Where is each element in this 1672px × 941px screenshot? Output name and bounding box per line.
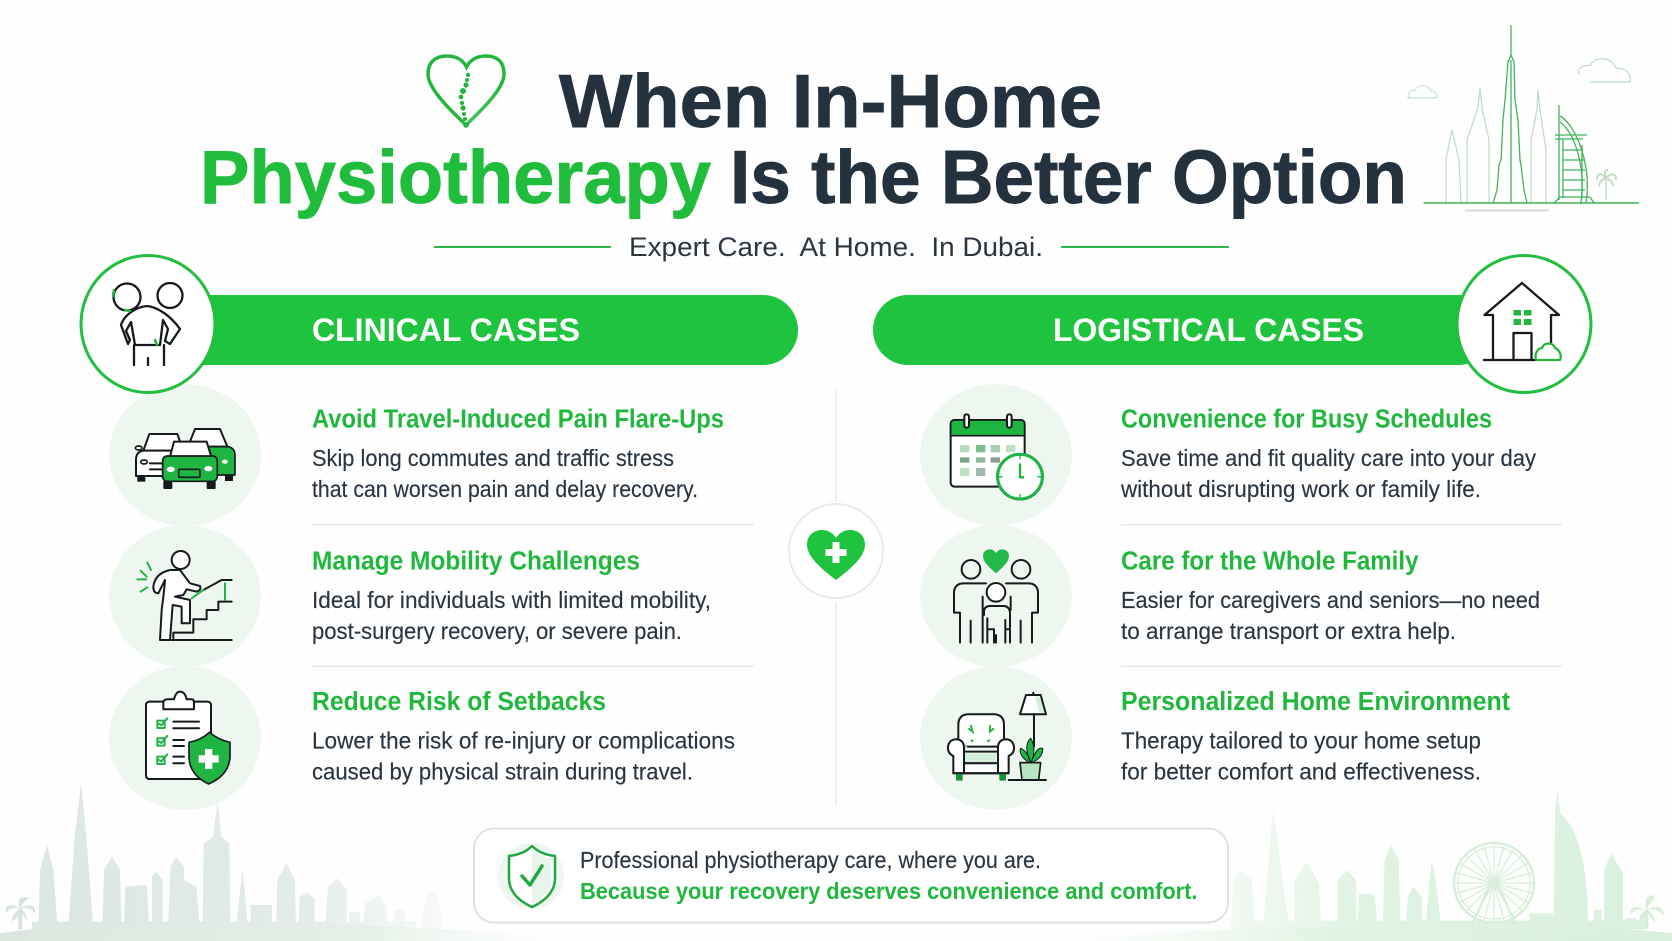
bottom-left skyline silhouette [0,783,587,941]
title: When In-Home [559,59,1102,143]
bottom-right skyline silhouette [1050,790,1672,941]
text block: personalized home environment [1121,688,1510,784]
callout: professional care box: Professional physiotherapy care, where you are. [580,847,1041,873]
icon: clipboard with shield [146,692,230,784]
title: Is the Better Option [730,135,1407,219]
text block: personalized home environment: for better comfort and effectiveness. [1121,758,1481,784]
icon: ferris wheel in skyline [1454,843,1534,925]
icon: calendar with clock [951,414,1043,500]
panel: clinical cases header: CLINICAL CASES [312,312,580,348]
text block: reduce risk of setbacks: Lower the risk of re-injury or complications [312,728,735,754]
text block: avoid travel-induced pain flare-ups: Skip long commutes and traffic stress [312,445,674,471]
panel: clinical cases header [81,256,798,392]
text block: personalized home environment: Therapy tailored to your home setup [1121,728,1481,754]
text block: avoid travel-induced pain flare-ups [312,406,724,502]
text block: convenience for busy schedules: without disrupting work or family life. [1120,476,1481,502]
text block: manage mobility challenges: Ideal for individuals with limited mobility, [312,587,711,613]
icon: armchair, lamp and plant [948,693,1046,781]
text block: reduce risk of setbacks [312,688,735,784]
subtitle with rules: Expert Care. At Home. In Dubai. [629,232,1043,262]
text block: avoid travel-induced pain flare-ups: Avoid Travel-Induced Pain Flare-Ups [312,406,724,434]
icon: person climbing stairs [137,551,232,640]
icon: house with bush [1484,283,1561,360]
icon: back pain figure [113,283,182,365]
icon: family with heart [954,549,1038,643]
text block: manage mobility challenges [312,548,711,644]
title: Physiotherapy [200,135,711,219]
text block: convenience for busy schedules [1120,406,1536,502]
text block: care for the whole family: to arrange transport or extra help. [1121,618,1456,644]
text block: reduce risk of setbacks: Reduce Risk of Setbacks [312,688,606,716]
callout: professional care box [474,828,1228,922]
panel: logistical cases header: LOGISTICAL CASES [1053,312,1364,348]
icon: heart with spine logo [428,56,504,128]
icon: Dubai skyline line art [1407,25,1639,210]
title [200,59,1407,219]
icon backgrounds column right [920,384,1072,810]
icon: shield with check [509,846,555,907]
icon: central heart with plus [789,504,883,598]
callout: professional care box: Because your recovery deserves convenience and comfort. [580,878,1198,904]
text block: care for the whole family [1121,548,1540,644]
text block: convenience for busy schedules: Save time and fit quality care into your day [1121,445,1536,471]
icon: cars in traffic [135,429,235,489]
text block: convenience for busy schedules: Convenience for Busy Schedules [1121,406,1492,434]
text block: personalized home environment: Personalized Home Environment [1121,688,1510,716]
text block: care for the whole family: Easier for caregivers and seniors—no need [1121,587,1540,613]
icon backgrounds column left [109,384,261,810]
text block: manage mobility challenges: Manage Mobility Challenges [312,548,640,576]
text block: care for the whole family: Care for the Whole Family [1121,548,1419,576]
text block: manage mobility challenges: post-surgery recovery, or severe pain. [312,618,682,644]
text block: reduce risk of setbacks: caused by physical strain during travel. [312,758,693,784]
text block: avoid travel-induced pain flare-ups: that can worsen pain and delay recovery. [312,476,698,502]
panel: logistical cases header [873,256,1591,392]
